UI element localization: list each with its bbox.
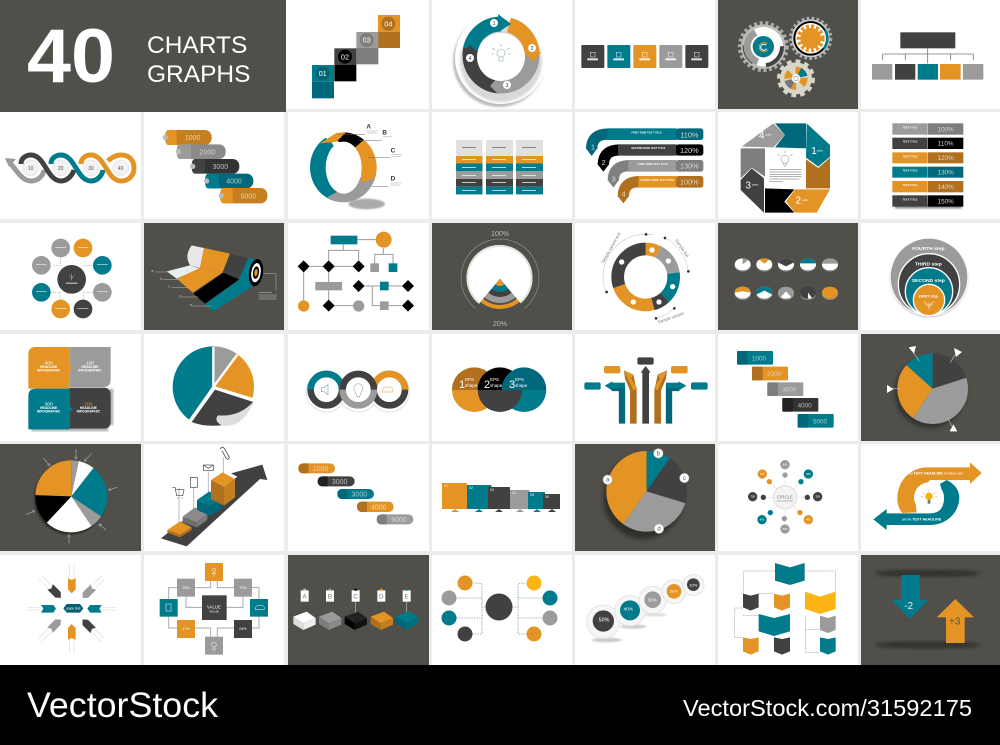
panel: descending tabs: 02 <box>469 486 473 490</box>
title number 40: 40 <box>27 14 115 99</box>
up arrow: +3 <box>949 616 961 627</box>
panel: wave steps: 10 <box>28 166 34 172</box>
panel: nested circles: SECOND step <box>912 278 945 284</box>
panel: stepped ribbons: 1000 <box>752 355 767 362</box>
panel: value block network: 04% <box>239 627 247 631</box>
panel: labelled boxes: E <box>405 593 409 600</box>
panel: three gears <box>718 0 858 109</box>
ring labels: B <box>382 129 387 136</box>
panel: pie with arrows <box>0 444 141 551</box>
panel: four rounded blocks: INFOGRAPHIC <box>37 369 61 373</box>
teal arrow: arrow TEXT HEADLINE <box>902 518 942 522</box>
footer logo text: VectorStock <box>27 686 219 725</box>
panel: value block network: 73% <box>239 586 247 590</box>
title words: GRAPHS <box>147 61 250 88</box>
panel: labelled pie: a <box>606 478 610 484</box>
panel: value block network: 17% <box>182 627 190 631</box>
panel: four rounded blocks: 100 <box>86 360 94 366</box>
panel: octagon diagram: option <box>817 150 824 153</box>
panel: radial dots <box>718 444 858 551</box>
panel: pie with peeled corner <box>144 334 284 441</box>
icon: document <box>190 477 197 487</box>
panel: six row percent bars: 100% <box>938 126 954 133</box>
panel: paper roll: e <box>190 303 192 307</box>
arrow bar four: FOURTH ROW TEXT TITLE <box>640 178 675 182</box>
panel: rising percent circles: 30% <box>648 597 657 602</box>
panel: four rounded blocks: 300 <box>45 401 53 407</box>
panel: six row percent bars: TEXT TITLE <box>903 169 918 173</box>
panel: descending tabs: 01 <box>444 484 448 488</box>
panel: four rounded blocks: HEADLINE <box>40 365 58 369</box>
panel: descending tabs: 03 <box>490 488 494 492</box>
panel: stepped pills <box>288 444 429 551</box>
ring labels: C <box>391 147 396 154</box>
panel: six row percent bars: 140% <box>938 184 954 191</box>
panel: octagon diagram: 1 <box>811 146 817 157</box>
panel: six row percent bars <box>861 112 1000 219</box>
panel: flowchart <box>288 223 429 330</box>
panel: rising percent circles: 20% <box>670 589 678 594</box>
arrow bar two: 120% <box>680 146 699 155</box>
panel: labelled boxes: C <box>353 593 358 600</box>
panel: branching arrows <box>575 334 715 441</box>
panel: six row percent bars: 130% <box>938 169 954 176</box>
panel: value block network: 23% <box>182 586 190 590</box>
panel: overlapping circles: shape <box>490 383 503 388</box>
panel: overlapping circles: EPS <box>465 377 474 382</box>
footer band <box>0 665 1000 745</box>
icon: paper clip <box>220 447 229 459</box>
panel: donut with arcs <box>575 222 715 332</box>
footer reference number: VectorStock.com/31592175 <box>683 695 972 721</box>
icon: bulb <box>777 151 793 167</box>
ring body <box>310 132 377 202</box>
panel: rising percent circles: 50% <box>599 618 610 624</box>
icon: speaker <box>321 385 328 395</box>
panel: paper roll: c <box>168 285 170 289</box>
title words: CHARTS <box>147 32 247 59</box>
orange arrow: arrow TEXT HEADLINE number one <box>903 471 963 475</box>
panel: stacked tags <box>144 112 284 219</box>
panel: layered wedge circle: 20% <box>493 321 507 328</box>
panel: overlapping circles: EPS <box>490 377 499 382</box>
panel: nested circles: THIRD step <box>915 261 942 267</box>
panel: paper roll: b <box>160 277 162 281</box>
arrow bar one: 1 <box>591 142 595 151</box>
ring labels: D <box>391 176 396 183</box>
arrow bar three: THIRD ROW TEXT TITLE <box>637 162 668 166</box>
panel: rising percent circles: 10% <box>689 582 698 587</box>
panel: octagon diagram: option <box>765 134 772 137</box>
panel: octagon diagram: option <box>752 183 759 186</box>
panel: octagon diagram: 2 <box>796 195 802 206</box>
panel: overlapping circles: 2 <box>484 379 490 391</box>
panel: radial arrows <box>0 555 141 665</box>
panel: radial dots: 200 <box>806 472 811 476</box>
panel: descending tabs: 06 <box>545 495 549 499</box>
panel: labelled boxes: D <box>379 593 384 600</box>
ring labels: A <box>366 123 371 130</box>
panel: labelled pie: b <box>657 451 661 457</box>
panel: four rounded blocks: HEADLINE <box>40 406 58 410</box>
panel: octagon diagram: 4 <box>759 130 765 141</box>
panel: descending tabs <box>432 444 572 551</box>
panel: wave steps: 30 <box>88 166 94 172</box>
panel: radial dots: CIRCLE <box>777 495 793 500</box>
panel: six row percent bars: 150% <box>938 198 954 205</box>
panel: nested circles: FIRST step <box>919 295 939 299</box>
panel: labelled boxes: B <box>328 593 332 600</box>
arrow bar three <box>608 160 703 188</box>
bottom arrow <box>68 624 76 653</box>
panel: overlapping circles: shape <box>515 383 528 388</box>
panel: rising percent circles: 40% <box>624 606 633 611</box>
panel: descending tabs: 04 <box>512 491 516 495</box>
panel: stair steps <box>286 0 429 109</box>
panel: stepped ribbons: 4000 <box>798 402 812 409</box>
panel: four rounded blocks: INFOGRAPHIC <box>78 369 102 373</box>
panel: octagon diagram <box>718 112 858 219</box>
panel: stair steps: 03 <box>363 36 371 45</box>
panel: four rounded blocks <box>0 334 141 441</box>
gear one <box>740 23 787 70</box>
panel: comparison table <box>432 112 572 219</box>
panel: stepped pills: 3000 <box>352 492 367 499</box>
icon: bulb <box>354 384 363 397</box>
isometric boxes <box>293 612 316 630</box>
panel: six row percent bars: 110% <box>938 141 954 148</box>
panel: stair steps: 02 <box>341 52 349 61</box>
wedge layers <box>475 279 525 318</box>
panel: four rounded blocks: INFOGRAPHIC <box>37 410 61 414</box>
down arrow: -2 <box>904 601 914 612</box>
panel: pie with triangle pointers <box>861 334 1000 441</box>
arrow bar four <box>618 176 703 203</box>
panel: radial dots: 800 <box>783 463 788 467</box>
panel: radial dots: 100 <box>760 472 765 476</box>
icon: light bulb <box>491 44 511 61</box>
arrow bar one <box>586 128 703 156</box>
panel: six row percent bars: 120% <box>938 155 954 162</box>
panel: ten small disks <box>718 223 858 330</box>
panel: stacked tags: 2000 <box>200 149 215 156</box>
title words <box>147 32 250 88</box>
pointer arrows <box>26 449 117 543</box>
box tags <box>301 590 411 602</box>
panel: stepped ribbons <box>718 334 858 441</box>
panel: four rounded blocks: HEADLINE <box>80 406 98 410</box>
arrow bar two: 2 <box>602 158 606 167</box>
panel: labelled pie <box>575 444 715 551</box>
panel: layered wedge circle: 100% <box>491 231 509 238</box>
panel: overlapping circles: EPS <box>515 377 524 382</box>
panel: overlapping circles <box>432 334 572 441</box>
panel: stepped ribbons: 2000 <box>767 371 782 378</box>
icon: light bulb <box>921 489 937 504</box>
icon: cloud <box>383 387 393 392</box>
panel: paper roll: a <box>151 269 154 273</box>
panel: stair steps: 04 <box>384 19 392 28</box>
panel: nested circles <box>861 223 1000 330</box>
panel: stacked tags: 1000 <box>185 135 201 142</box>
panel: wave steps: 20 <box>58 166 64 172</box>
panel: six row percent bars: TEXT TITLE <box>903 140 918 144</box>
arrow bar four: 4 <box>622 190 626 199</box>
panel: descending tabs: 05 <box>530 493 534 497</box>
panel: org chart <box>861 0 1000 109</box>
ring labels <box>366 123 396 183</box>
arrow bar three: 130% <box>680 162 699 171</box>
left arrow <box>27 605 56 613</box>
arrow bar four: 100% <box>680 177 699 186</box>
panel: radial dots: 600 <box>760 518 765 522</box>
panel: donut with arcs: Sample text <box>674 238 691 259</box>
panel: isometric bars on arrow <box>144 444 284 551</box>
panel: five square tiles <box>575 0 715 109</box>
panel: nested circles: FOURTH step <box>912 246 945 252</box>
panel: overlapping circles: 3 <box>509 379 515 391</box>
icon: cart <box>172 487 184 498</box>
panel: four rounded blocks: HEADLINE <box>81 365 99 369</box>
panel: two swirling arrows <box>861 444 1000 551</box>
panel: title banner <box>0 0 286 112</box>
panel: overlapping circles: shape <box>465 383 478 388</box>
panel: wave steps: 40 <box>118 166 124 172</box>
panel: circular four step cycle: 1 <box>493 21 496 27</box>
panel: overlapping circles: 1 <box>459 379 465 391</box>
panel: layered wedge circle <box>432 223 572 330</box>
panel: labelled boxes: A <box>303 593 308 600</box>
top arrow <box>68 564 76 593</box>
diagonal arrows <box>37 574 64 600</box>
panel: stair steps: 01 <box>319 69 327 78</box>
arrow bar one: FIRST ROW TEXT TITLE <box>631 130 662 134</box>
icon: mail <box>203 465 213 470</box>
arrow bar two: SECOND ROW TEXT TITLE <box>631 146 666 150</box>
panel: 3D ring chart <box>288 112 429 219</box>
panel: curved arrow bars <box>575 112 715 219</box>
panel: stepped pills: 3000 <box>332 479 348 486</box>
panel: radial dots: 700 <box>750 495 755 499</box>
panel: three linked rings <box>288 334 429 441</box>
panel: four rounded blocks: INFOGRAPHIC <box>77 410 101 414</box>
gear two <box>788 16 833 61</box>
panel: stacked tags: 4000 <box>226 179 242 186</box>
panel: chevron flow <box>718 555 858 665</box>
panel: value block network: VALUE <box>209 610 219 614</box>
panel: paper roll: d <box>179 294 181 298</box>
panel: donut with arcs: Sample sample text <box>600 231 622 264</box>
panel: labelled pie: d <box>657 527 661 533</box>
panel: four rounded blocks: 400 <box>45 360 53 366</box>
gear three <box>779 62 813 95</box>
right arrow <box>87 605 117 613</box>
roll body <box>187 245 265 287</box>
ring segments <box>470 24 532 86</box>
panel: radial dots: 500 <box>783 527 788 531</box>
panel: stacked tags: 3000 <box>213 164 228 171</box>
panel: six row percent bars: TEXT TITLE <box>903 125 918 129</box>
center label: place text <box>66 607 81 611</box>
panel: octagon diagram: 3 <box>746 180 752 191</box>
panel: radial dots: 400 <box>806 518 811 522</box>
flat strips <box>167 265 254 311</box>
panel: labelled pie: c <box>683 476 686 482</box>
panel: stepped pills: 1000 <box>313 466 329 473</box>
panel: circular four step cycle: 2 <box>531 46 534 52</box>
panel: value block network: VALUE <box>207 605 221 610</box>
panel: stepped ribbons: 5000 <box>813 418 828 425</box>
panel: six row percent bars: TEXT TITLE <box>903 183 918 187</box>
panel: octagon diagram: option <box>802 199 809 202</box>
panel: rising percent circles <box>575 555 715 665</box>
panel: four rounded blocks: 200 <box>84 401 93 407</box>
panel: circular four step cycle: 4 <box>469 56 472 62</box>
arrow bar three: 3 <box>612 174 616 183</box>
panel: labelled boxes <box>288 555 429 665</box>
panel: circular four step cycle <box>432 0 572 109</box>
panel: stepped ribbons: 3000 <box>782 387 797 394</box>
panel: donut with arcs: Sample sample <box>657 310 685 325</box>
arrow bar two <box>598 144 703 172</box>
panel: value block network <box>144 555 284 665</box>
panel: six row percent bars: TEXT TITLE <box>903 154 918 158</box>
arrow bar one: 110% <box>680 130 699 139</box>
panel: paper roll <box>144 223 284 330</box>
panel: stepped pills: 5000 <box>391 517 407 524</box>
panel: radial dots: INFOGRAPHIC <box>777 500 793 503</box>
panel: circular four step cycle: 3 <box>506 83 509 89</box>
panel: circle hub <box>0 223 141 330</box>
panel: stepped pills: 4000 <box>371 505 387 512</box>
panel: wave steps <box>0 112 141 219</box>
panel: mind map <box>432 555 572 665</box>
panel: radial dots: 300 <box>815 495 820 499</box>
panel: up and down arrows <box>861 555 1000 665</box>
panel: six row percent bars: TEXT TITLE <box>903 197 918 201</box>
panel: stacked tags: 5000 <box>241 193 256 200</box>
